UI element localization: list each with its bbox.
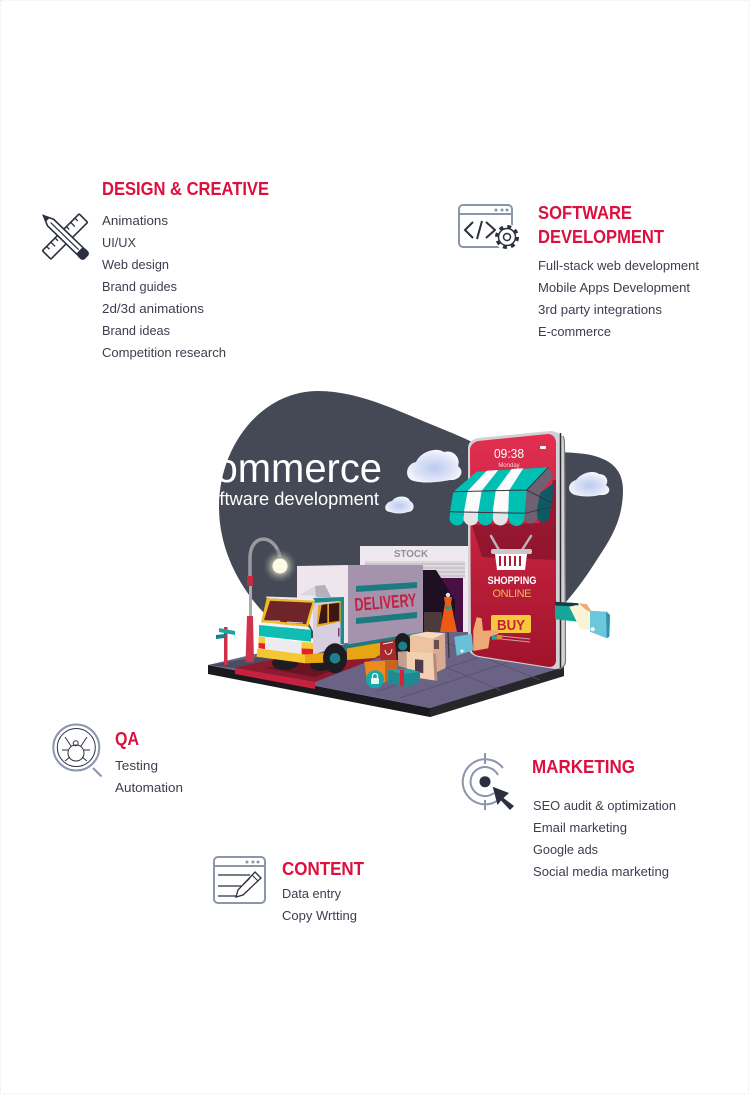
pointing hand bbox=[454, 617, 502, 656]
list: Web design bbox=[102, 257, 169, 272]
section: QA bbox=[53, 724, 183, 795]
hand with payment card bbox=[555, 602, 610, 638]
time and date: 09:38 bbox=[494, 446, 524, 461]
background blob bbox=[219, 391, 623, 640]
list bbox=[282, 886, 357, 923]
heading: CONTENT bbox=[282, 859, 364, 879]
icon: window with pencil bbox=[214, 857, 265, 903]
icon: bug under magnifier bbox=[53, 724, 102, 776]
list: Copy Wrtting bbox=[282, 908, 357, 923]
shop awning bbox=[450, 467, 553, 526]
list bbox=[115, 758, 183, 795]
truck front wheel bbox=[323, 643, 347, 673]
heading: MARKETING bbox=[532, 757, 635, 777]
list: Brand ideas bbox=[102, 323, 170, 338]
heading: SOFTWARE bbox=[538, 203, 632, 223]
heading: QA bbox=[115, 729, 139, 749]
smartphone: Monday bbox=[498, 463, 520, 469]
stock building: STOCK bbox=[394, 549, 429, 560]
headline text on blob: Ecommerce bbox=[169, 445, 382, 491]
list: 2d/3d animations bbox=[102, 301, 205, 316]
list: Google ads bbox=[533, 842, 598, 857]
heading: DEVELOPMENT bbox=[538, 227, 664, 247]
buy button: BUY bbox=[497, 617, 525, 634]
street lamp bbox=[246, 539, 297, 662]
list: Social media marketing bbox=[533, 864, 669, 879]
list: Email marketing bbox=[533, 820, 627, 835]
parcels and bags bbox=[364, 632, 446, 688]
heading: DESIGN & CREATIVE bbox=[102, 179, 269, 199]
list: SEO audit & optimization bbox=[533, 798, 676, 813]
section: design and creative bbox=[40, 179, 269, 360]
list: Automation bbox=[115, 780, 183, 795]
list: Mobile Apps Development bbox=[538, 280, 690, 295]
shopping online label: SHOPPING bbox=[488, 575, 536, 587]
list: UI/UX bbox=[102, 235, 136, 250]
icon: code window with gear bbox=[459, 205, 520, 250]
icon: target with cursor bbox=[463, 753, 514, 810]
smartphone bbox=[468, 431, 566, 669]
dress on mannequin bbox=[440, 593, 457, 658]
icon: pencil and ruler bbox=[40, 212, 90, 261]
clouds bbox=[385, 450, 609, 514]
truck rear wheel bbox=[394, 633, 411, 660]
list: Data entry bbox=[282, 886, 341, 901]
list: 3rd party integrations bbox=[538, 302, 663, 317]
awning shadow bbox=[472, 480, 556, 560]
list bbox=[102, 213, 226, 360]
section: marketing bbox=[463, 753, 676, 879]
list: Full-stack web development bbox=[538, 258, 699, 273]
list: Animations bbox=[102, 213, 169, 228]
stock building bbox=[360, 546, 470, 632]
list: Brand guides bbox=[102, 279, 177, 294]
list: Competition research bbox=[102, 345, 226, 360]
buy button bbox=[491, 615, 531, 642]
delivery lettering: DELIVERY bbox=[354, 589, 418, 615]
list bbox=[538, 258, 699, 339]
street sign bbox=[216, 627, 235, 665]
list: E-commerce bbox=[538, 324, 611, 339]
section: software development bbox=[459, 203, 699, 339]
list: Testing bbox=[115, 758, 158, 773]
shopping basket bbox=[491, 536, 532, 570]
panel: central illustration bbox=[169, 391, 623, 717]
section: content bbox=[214, 857, 364, 923]
platform bbox=[208, 630, 564, 717]
headline text on blob: Software development bbox=[197, 489, 379, 509]
delivery truck bbox=[257, 565, 423, 673]
heading bbox=[538, 203, 664, 247]
roof vent bbox=[300, 585, 331, 597]
list bbox=[533, 798, 676, 879]
smartphone: ONLINE bbox=[492, 588, 532, 600]
